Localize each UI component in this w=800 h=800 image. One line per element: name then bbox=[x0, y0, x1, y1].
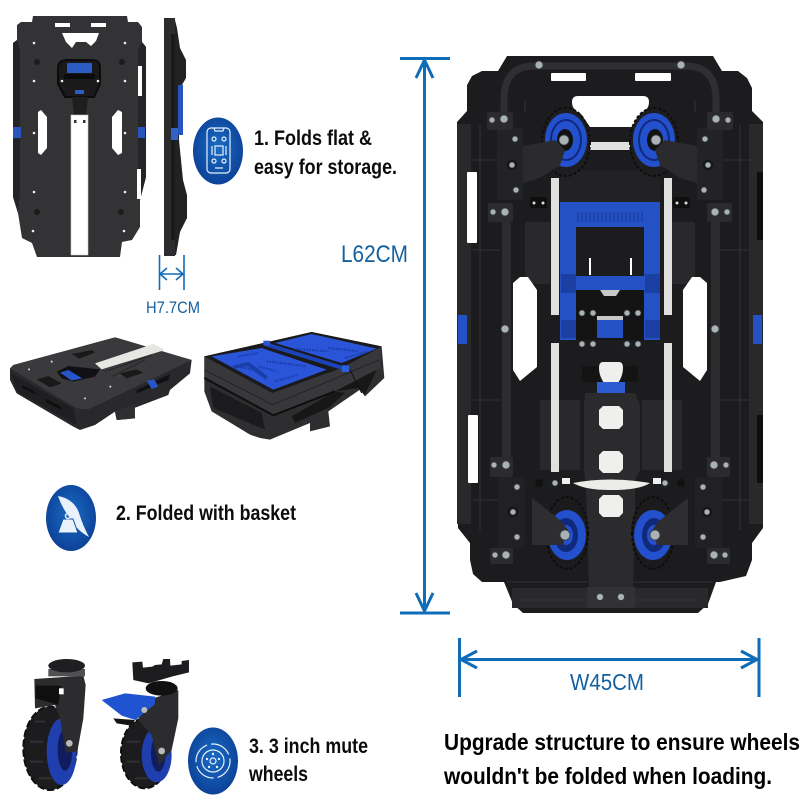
bottom plate bbox=[587, 587, 635, 608]
side rails and blue clips bbox=[458, 222, 762, 458]
panel: folded cart, perspective bbox=[10, 337, 192, 430]
blue folding frame bbox=[560, 202, 660, 340]
right edge bumps bbox=[757, 172, 763, 483]
curved cross tube bbox=[562, 478, 661, 490]
image: swivel caster bbox=[23, 659, 86, 790]
right bottom wheel mechanism bbox=[632, 457, 730, 569]
centre latch bbox=[582, 362, 638, 393]
text: feature 1: 1. Folds flat & bbox=[254, 127, 372, 150]
dimension: width 45 cm bbox=[460, 638, 759, 697]
label: width: W45CM bbox=[570, 669, 644, 695]
text: structure upgrade note: wouldn't be folded when loading. bbox=[443, 763, 772, 789]
panel: flat folded cart, side view bbox=[164, 18, 187, 256]
text: feature 3: wheels bbox=[248, 763, 308, 786]
text: feature 3: 3. 3 inch mute bbox=[249, 735, 368, 758]
panel: flat folded cart, top view bbox=[13, 16, 146, 257]
text: feature 1: easy for storage. bbox=[254, 156, 397, 179]
left bottom wheel mechanism bbox=[490, 457, 588, 569]
text: structure upgrade note bbox=[443, 729, 800, 789]
text: feature 2: 2. Folded with basket bbox=[116, 502, 296, 525]
label: length: L62CM bbox=[341, 241, 408, 268]
dimension: length 62 cm bbox=[341, 58, 450, 613]
text: feature 1 bbox=[254, 127, 397, 179]
handle recess bbox=[58, 60, 100, 115]
panel: folded cart with basket bbox=[204, 332, 384, 440]
icon: wheel badge bbox=[188, 728, 238, 794]
panel: cart underside, main view bbox=[457, 56, 763, 613]
dimension: height 7.7 cm bbox=[146, 255, 200, 317]
white cut-outs bbox=[467, 73, 707, 483]
board outline bbox=[457, 56, 763, 613]
white centre strip bbox=[71, 115, 88, 255]
label: height: H7.7CM bbox=[146, 298, 200, 317]
dark central deck bbox=[560, 170, 660, 202]
right top wheel mechanism bbox=[630, 108, 733, 222]
centre spine bbox=[584, 393, 640, 590]
image: braked caster bbox=[102, 659, 189, 788]
icon: folding board badge bbox=[193, 118, 243, 184]
carry handle tube bbox=[504, 66, 716, 114]
text: feature 3 bbox=[248, 735, 368, 786]
blue side clips bbox=[13, 127, 145, 138]
silver tubes bbox=[551, 142, 672, 472]
spine holes bbox=[599, 406, 623, 517]
icon: feather and weight badge bbox=[46, 485, 96, 551]
left top wheel mechanism bbox=[487, 108, 590, 222]
